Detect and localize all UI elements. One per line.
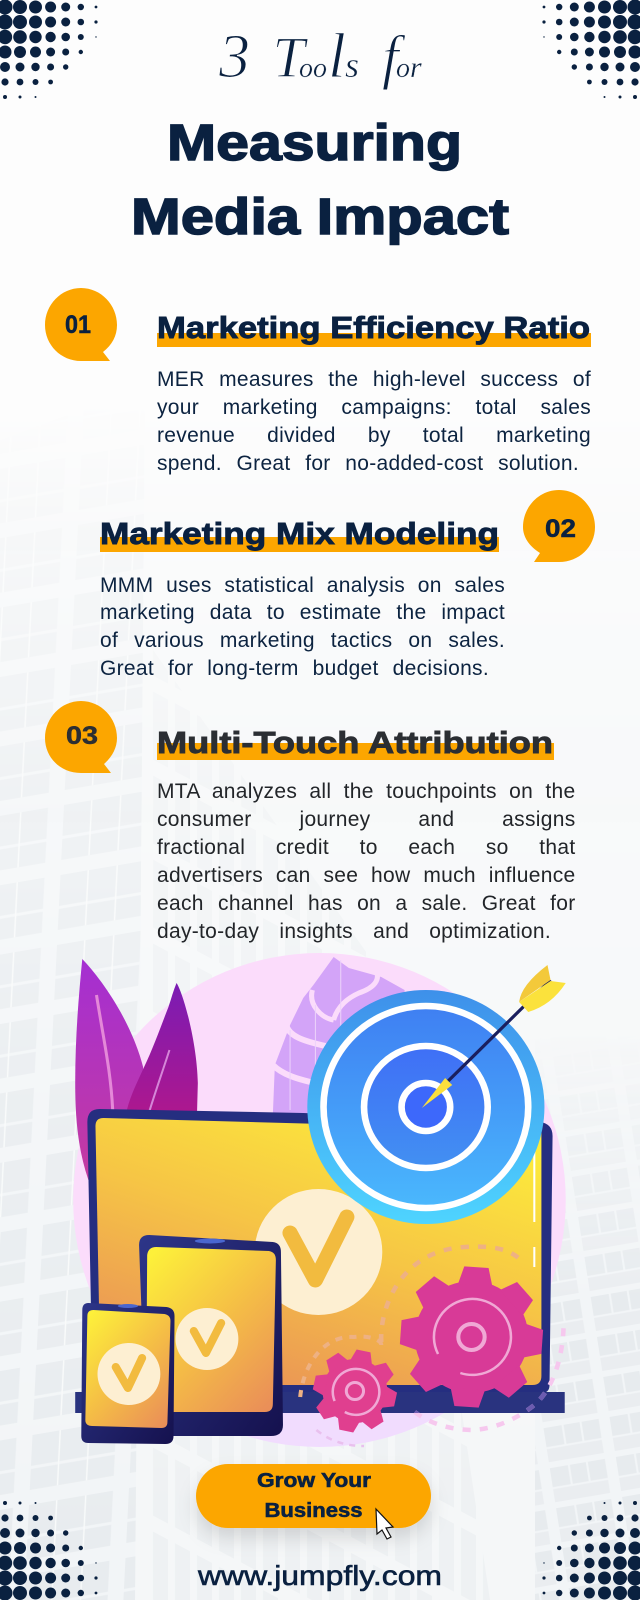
title line: Media Impact: Media Impact [131,188,509,245]
back lavender leaf [273,957,405,1115]
text: MER description: revenue divided by total marketing [157,424,591,447]
heading 3 with highlight bar: Multi-Touch Attribution [157,725,553,760]
arrow [422,965,566,1108]
magenta leaf left [75,959,146,1180]
title line: Measuring: Measuring [167,114,462,171]
text: MTA description: day-to-day insights and optimization. [157,920,551,943]
badge 03: 03 [66,722,98,750]
badge 03 [45,701,117,773]
text: MMM description: marketing data to estimate the impact [100,601,505,624]
icon: mouse cursor [376,1509,393,1539]
badge 01 [45,288,117,361]
text: MTA description: each channel has on a sale. Great for [157,892,576,915]
heading 2 with highlight bar: Marketing Mix Modeling [100,516,499,551]
text: MTA description: consumer journey and assigns [157,808,576,831]
button: Grow Your Business [196,1464,431,1528]
script heading: 3 Tools for: r [410,51,422,84]
text: MER description: MER measures the high-level success of [157,368,591,391]
text: MER description: spend. Great for no-added-cost solution. [157,452,579,475]
decorative dots: bottom left [0,1501,98,1600]
large check circle [255,1189,382,1315]
text: MMM description: of various marketing tactics on sales. [100,629,505,652]
button: Grow Your Business: Business [264,1500,362,1522]
phone [81,1303,175,1444]
text: MMM description: Great for long-term budget decisions. [100,657,489,680]
laptop stand [75,1392,565,1413]
illustration: devices, target and gears [70,950,572,1452]
dashed gear paths [300,1247,564,1446]
button: Grow Your Business: Grow Your [257,1470,371,1492]
badge 02 [523,490,595,562]
script heading: 3 Tools for: o [299,53,313,84]
text: MER description [157,368,591,475]
magenta leaf right [125,983,198,1120]
right white highlight on screen [533,1147,535,1267]
bullseye target [307,990,544,1224]
small gear [312,1349,398,1433]
badge 01: 01 [65,311,91,339]
script heading: 3 Tools for: l [328,20,346,91]
large gear [400,1266,543,1408]
script heading: 3 Tools for: s [345,45,359,85]
pink backdrop circle [70,950,572,1452]
text: MTA description: MTA analyzes all the touchpoints on the [157,780,576,803]
laptop body [87,1109,553,1393]
decorative dots: bottom right [542,1501,640,1600]
tablet [139,1235,283,1436]
text: MER description: your marketing campaigns: total sales [157,396,591,419]
text: MMM description: MMM uses statistical analysis on sales [100,574,505,596]
script heading: 3 Tools for: 3 [218,23,250,91]
script heading: 3 Tools for: T [258,25,308,90]
script heading: 3 Tools for: o [396,53,410,84]
text: MMM description [100,574,505,680]
website url: www.jumpfly.com [197,1560,442,1591]
script heading: 3 Tools for: f [367,24,406,90]
heading 1 with highlight bar: Marketing Efficiency Ratio [157,310,590,345]
decorative dots: top left [0,0,98,99]
badge 02: 02 [545,515,576,543]
text: MTA description: fractional credit to each so that [157,836,576,859]
script heading: 3 Tools for: o [313,53,327,84]
text: MTA description: advertisers can see how much influence [157,864,576,887]
laptop screen [95,1118,541,1385]
text: MTA description [157,780,576,943]
decorative dots: top right [542,0,640,99]
